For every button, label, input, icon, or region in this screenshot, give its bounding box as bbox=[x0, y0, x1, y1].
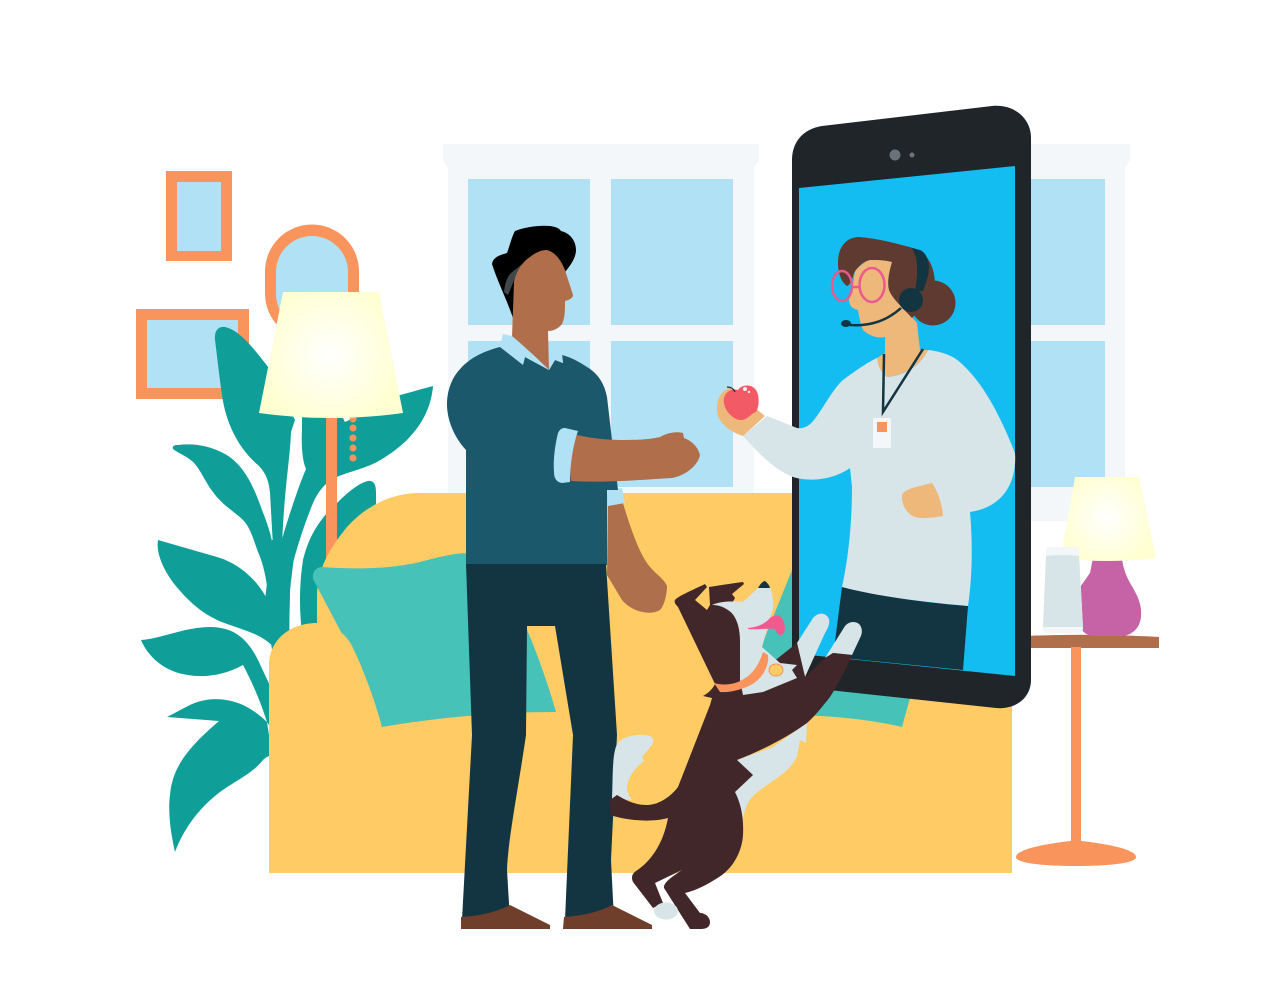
man cuff: lower bbox=[607, 488, 625, 506]
leaf: lower left bbox=[141, 627, 272, 730]
dog chest fur bbox=[735, 723, 807, 820]
mirror frame bbox=[265, 224, 359, 340]
table lamp vase bbox=[1078, 558, 1141, 636]
man bbox=[447, 226, 700, 929]
dog back paw bbox=[654, 902, 678, 920]
dog tail fur bbox=[612, 735, 653, 800]
dog nose bbox=[758, 581, 770, 588]
leaf: top bbox=[215, 327, 295, 547]
doctor hand on hip bbox=[902, 483, 943, 518]
leaf: upper left bbox=[173, 444, 278, 610]
dog paw: left bbox=[797, 614, 829, 677]
lamp pull chain bbox=[350, 416, 356, 462]
dog tag bbox=[769, 664, 783, 676]
phone body bbox=[792, 106, 1031, 708]
doctor hair bbox=[838, 237, 935, 318]
cushion: right bbox=[761, 570, 915, 727]
apple bbox=[724, 386, 759, 420]
leaf: behind sofa bbox=[300, 481, 376, 640]
phone screen bbox=[799, 166, 1015, 676]
camera bbox=[890, 150, 914, 160]
lamp pole bbox=[326, 410, 337, 570]
man sweater bbox=[447, 347, 618, 565]
picture frame: left bbox=[136, 309, 249, 399]
leaf: bottom bbox=[167, 699, 272, 852]
man trousers bbox=[462, 564, 617, 920]
headset bbox=[841, 248, 929, 327]
window: left bbox=[443, 144, 759, 500]
cushion: left bbox=[313, 553, 556, 727]
plant bbox=[141, 327, 433, 852]
dog paw: right bbox=[825, 622, 862, 658]
side table bbox=[1016, 477, 1159, 866]
ID badge bbox=[873, 418, 891, 448]
dog tongue bbox=[748, 616, 785, 635]
doctor hand holding apple bbox=[717, 388, 765, 436]
dog collar bbox=[714, 652, 768, 692]
leaf: right bbox=[270, 386, 433, 640]
doctor bbox=[717, 237, 1015, 670]
doctor neck and face bbox=[849, 258, 928, 377]
table lamp shade bbox=[1061, 477, 1156, 561]
man shoes bbox=[461, 905, 652, 929]
man shirt collar bbox=[500, 334, 563, 370]
window: right bbox=[1020, 144, 1130, 521]
dog bbox=[610, 581, 862, 929]
sofa arm bbox=[269, 623, 400, 873]
doctor trousers bbox=[833, 587, 968, 670]
glasses bbox=[832, 268, 884, 302]
leaf: middle left bbox=[158, 540, 290, 650]
canister bbox=[1043, 547, 1083, 633]
phone bbox=[792, 106, 1031, 708]
floor lamp bbox=[259, 292, 403, 570]
man hair highlight bbox=[504, 262, 527, 295]
man hair bbox=[492, 226, 576, 318]
plant stem bbox=[265, 540, 296, 650]
picture frame: top bbox=[166, 171, 232, 261]
doctor body bbox=[743, 350, 1015, 606]
doctor hair bun bbox=[910, 280, 956, 326]
lamp shade bbox=[259, 292, 403, 418]
table leg bbox=[1071, 647, 1081, 843]
man sleeve cuff bbox=[554, 428, 578, 483]
table base bbox=[1016, 841, 1136, 866]
man lower arm bbox=[607, 500, 667, 613]
man face and neck bbox=[512, 250, 573, 370]
dog face bbox=[712, 587, 797, 695]
table top bbox=[1025, 635, 1159, 648]
man forearm bbox=[570, 432, 700, 482]
sofa back bbox=[317, 493, 1012, 873]
lanyard bbox=[883, 349, 923, 412]
dog body bbox=[610, 582, 852, 929]
